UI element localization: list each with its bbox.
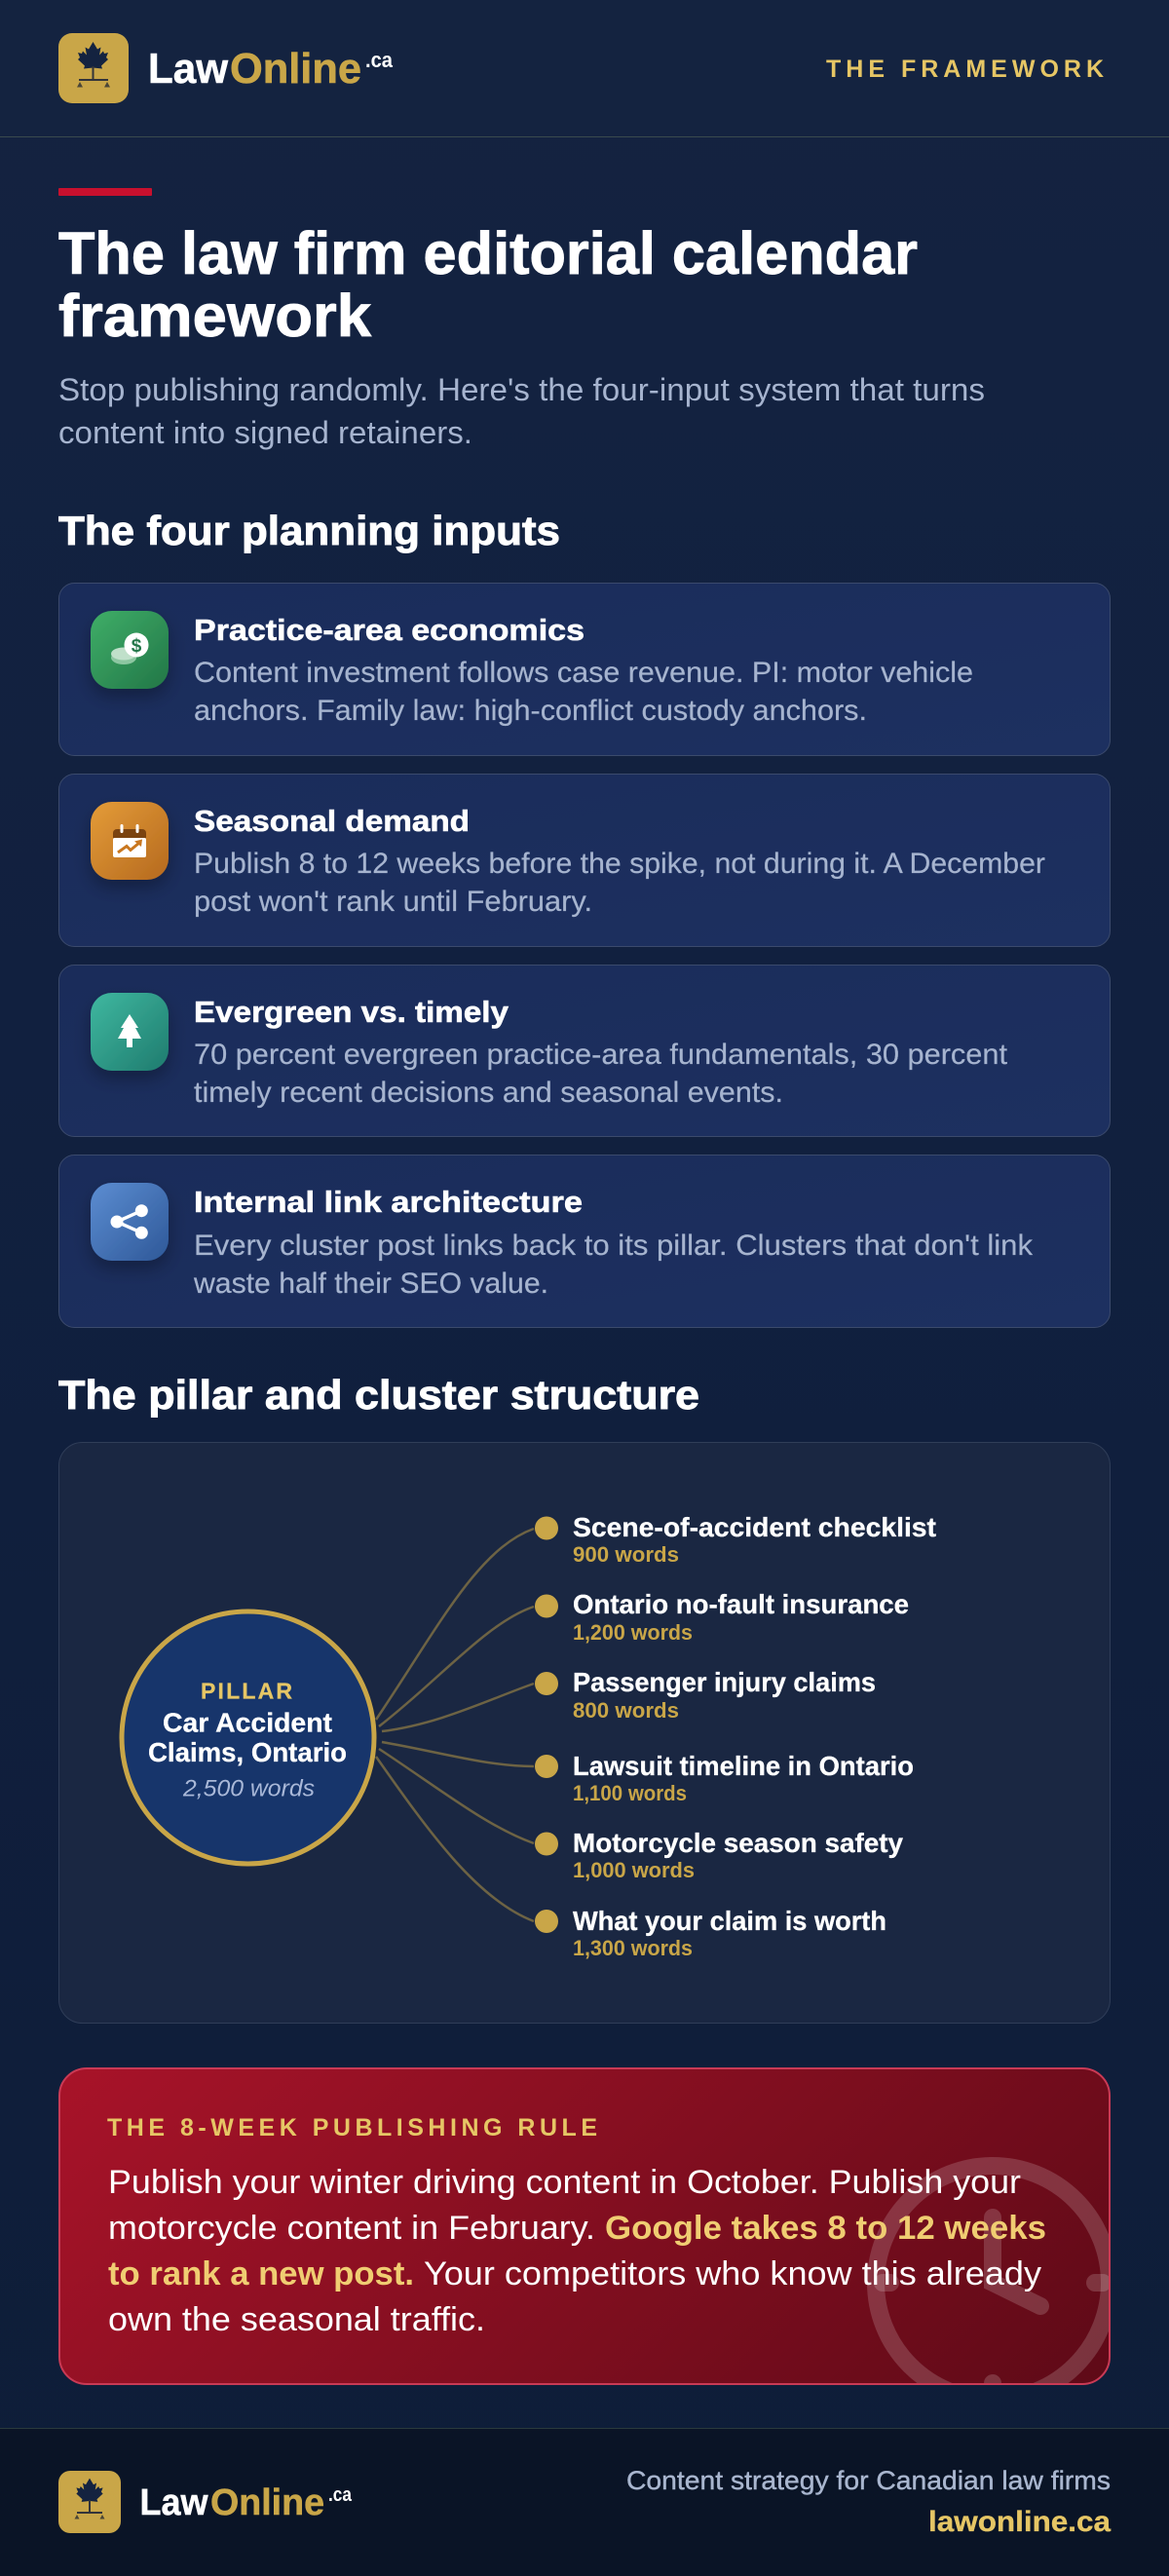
footer wordmark: .ca	[328, 2484, 353, 2506]
panel: practice-area economics	[58, 583, 1111, 756]
icon: maple leaf and scales logo	[58, 33, 129, 103]
cluster item: no-fault: Ontario no-fault insurance	[573, 1589, 909, 1619]
footer wordmark: Online	[210, 2482, 324, 2523]
icon: calendar trend	[91, 802, 169, 880]
text: Seasonal demand	[194, 804, 470, 838]
text	[193, 1185, 1034, 1300]
pillar circle: PILLAR	[201, 1678, 292, 1703]
cluster item: no-fault: 1,200 words	[573, 1620, 693, 1645]
footer url: lawonline.ca	[928, 2506, 1111, 2538]
body copy: Publish your winter driving content in October. Publish your	[108, 2164, 1021, 2201]
callout: 8-week publishing rule	[59, 2068, 1110, 2400]
wordmark: .ca	[365, 48, 394, 72]
subtitle	[58, 372, 985, 450]
cluster item: lawsuit timeline	[535, 1751, 914, 1805]
body copy	[108, 2164, 1046, 2338]
text: Internal link architecture	[194, 1185, 583, 1219]
body copy: motorcycle content in February.	[108, 2210, 595, 2247]
subtitle: Stop publishing randomly. Here's the four-input system that turns	[58, 372, 985, 407]
heading: planning inputs: The four planning inputs	[58, 508, 560, 553]
text	[194, 804, 1045, 918]
pillar circle: Claims, Ontario	[148, 1737, 347, 1767]
cluster item: motorcycle: 1,000 words	[573, 1858, 695, 1882]
footer	[0, 2428, 1169, 2576]
title: The law firm editorial calendar	[58, 220, 918, 286]
pillar circle	[122, 1611, 374, 1864]
icon: share nodes	[91, 1183, 169, 1261]
footer wordmark: Law	[140, 2482, 208, 2523]
accent bar	[58, 188, 152, 196]
text: timely recent decisions and seasonal events.	[194, 1077, 783, 1109]
header	[0, 0, 1169, 137]
cluster item: claim worth: 1,300 words	[573, 1936, 693, 1960]
cluster item: passenger	[535, 1667, 876, 1723]
cluster item: passenger: Passenger injury claims	[573, 1667, 876, 1697]
header tag: THE FRAMEWORK	[826, 56, 1104, 83]
cluster item: lawsuit timeline: Lawsuit timeline in Ontario	[573, 1751, 914, 1781]
text	[194, 613, 973, 727]
text: waste half their SEO value.	[193, 1268, 548, 1300]
cluster item: claim worth: What your claim is worth	[573, 1906, 886, 1936]
text: post won't rank until February.	[194, 886, 592, 918]
panel: seasonal demand	[58, 774, 1111, 947]
cluster item: no-fault	[535, 1589, 909, 1645]
body copy: own the seasonal traffic.	[108, 2301, 485, 2338]
body copy: Your competitors who know this already	[424, 2255, 1041, 2292]
title	[58, 220, 918, 349]
heading: pillar and cluster: The pillar and cluster structure	[58, 1372, 699, 1418]
panel: evergreen vs timely	[58, 965, 1111, 1136]
pillar circle: 2,500 words	[182, 1775, 315, 1802]
text: Evergreen vs. timely	[194, 995, 509, 1029]
cluster item: motorcycle: Motorcycle season safety	[573, 1828, 903, 1858]
cluster item: passenger: 800 words	[573, 1698, 679, 1723]
connector lines	[376, 1529, 534, 1921]
cluster item: scene-of-accident: Scene-of-accident checklist	[573, 1512, 936, 1542]
wordmark	[148, 45, 394, 93]
panel: internal link architecture	[58, 1155, 1111, 1327]
label: THE 8-WEEK PUBLISHING RULE	[107, 2114, 597, 2141]
pillar circle: Car Accident	[163, 1707, 332, 1738]
cluster item: scene-of-accident	[535, 1512, 936, 1567]
body copy: to rank a new post.	[108, 2255, 414, 2292]
icon: footer logo	[58, 2471, 121, 2533]
title: framework	[58, 283, 371, 349]
cluster item: scene-of-accident: 900 words	[573, 1542, 679, 1567]
text: Content investment follows case revenue. PI: motor vehicle	[194, 657, 973, 689]
footer tagline: Content strategy for Canadian law firms	[626, 2466, 1111, 2495]
text: 70 percent evergreen practice-area fundamentals, 30 percent	[194, 1039, 1008, 1071]
wordmark: Online	[230, 45, 361, 93]
body copy: Google takes 8 to 12 weeks	[605, 2210, 1046, 2247]
icon: coins: $	[132, 636, 142, 657]
cluster item: claim worth	[535, 1906, 886, 1960]
cluster item: motorcycle	[535, 1828, 903, 1882]
text: Publish 8 to 12 weeks before the spike, not during it. A December	[194, 848, 1045, 880]
wordmark: Law	[148, 45, 229, 93]
footer wordmark	[140, 2482, 353, 2523]
subtitle: content into signed retainers.	[58, 415, 472, 450]
text: Every cluster post links back to its pillar. Clusters that don't link	[194, 1230, 1034, 1262]
text: anchors. Family law: high-conflict custody anchors.	[194, 695, 867, 727]
text	[194, 995, 1008, 1109]
icon: evergreen tree	[91, 993, 169, 1071]
panel: pillar and cluster diagram	[58, 1442, 1111, 2023]
icon: coins	[91, 611, 169, 689]
text: Practice-area economics	[194, 613, 584, 647]
icon: clock watermark	[876, 2166, 1110, 2400]
cluster item: lawsuit timeline: 1,100 words	[573, 1781, 687, 1805]
